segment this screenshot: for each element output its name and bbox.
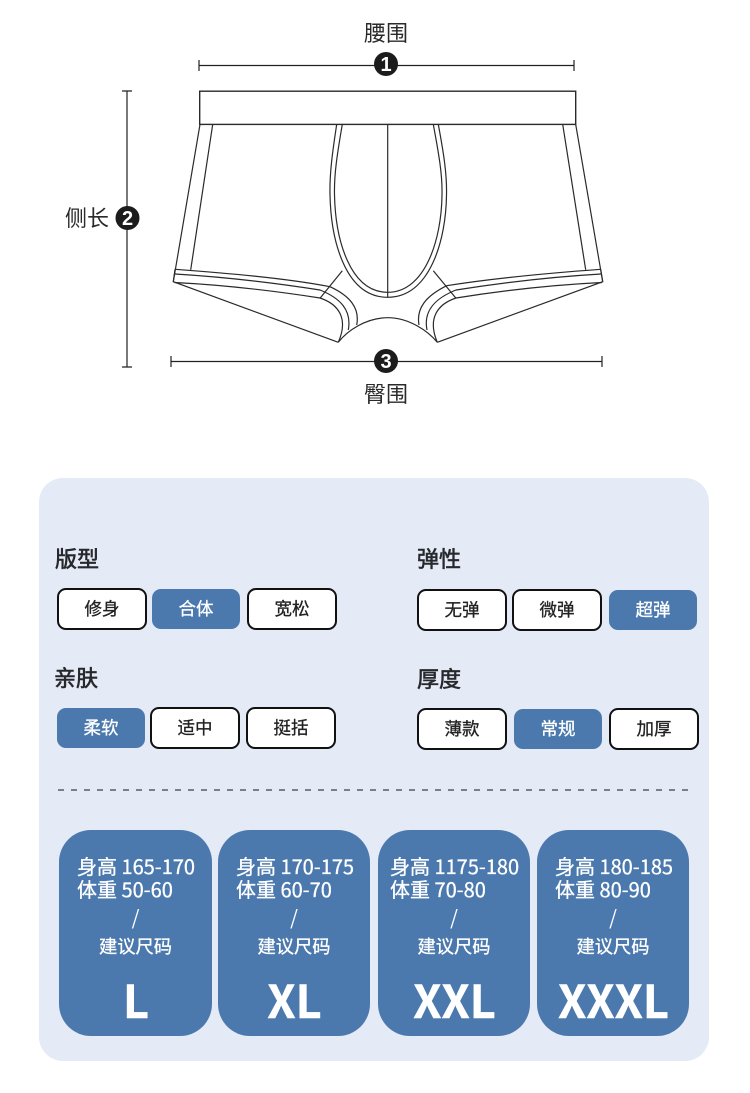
size card: L: 建议尺码 bbox=[99, 933, 172, 959]
badge 3: 3 bbox=[380, 351, 392, 373]
options: 版型 bbox=[57, 588, 337, 630]
size card: XL: / bbox=[290, 902, 298, 931]
size card: XXXL: / bbox=[609, 902, 617, 931]
badge 2 bbox=[116, 206, 140, 230]
badge 2: 2 bbox=[122, 208, 133, 230]
options: 弹性: 无弹 bbox=[444, 597, 480, 622]
badge 1: 1 bbox=[380, 54, 392, 76]
options: 亲肤: 柔软 bbox=[84, 715, 118, 740]
dashed divider bbox=[58, 789, 688, 791]
size card: XXL: 身高 1175-180 bbox=[390, 851, 519, 880]
options: 厚度: 加厚 bbox=[636, 716, 672, 741]
options: 版型: 修身 bbox=[84, 596, 120, 621]
size card: XL: 体重 60-70 bbox=[236, 874, 332, 903]
label: hip: 臀围 bbox=[364, 377, 408, 409]
size card: L: / bbox=[132, 902, 139, 931]
measurement diagram: boxer briefs bbox=[65, 16, 604, 409]
options: 亲肤: 挺括 bbox=[274, 715, 308, 740]
size card: XXXL: 建议尺码 bbox=[576, 933, 650, 959]
size card: L: 身高 165-170 bbox=[77, 851, 195, 880]
options: 厚度: 薄款 bbox=[444, 716, 480, 741]
size card: XL: 身高 170-175 bbox=[236, 851, 354, 880]
label: waist: 腰围 bbox=[364, 16, 408, 48]
badge 1 bbox=[374, 52, 398, 76]
size card: XXXL: 体重 80-90 bbox=[555, 874, 651, 903]
size card: XL bbox=[218, 830, 370, 1036]
heading: 弹性: 弹性 bbox=[417, 542, 461, 574]
size card: XXL: XXL bbox=[413, 966, 496, 1031]
options: 版型: 宽松 bbox=[274, 596, 310, 621]
garment outline bbox=[173, 91, 603, 342]
options: 厚度 bbox=[417, 708, 699, 750]
options: 厚度: 常规 bbox=[540, 716, 576, 741]
label: side length: 侧长 bbox=[65, 201, 109, 233]
size card: XXL bbox=[378, 830, 530, 1036]
options: 弹性 bbox=[417, 589, 697, 631]
size card: XXL: 建议尺码 bbox=[417, 933, 491, 959]
heading: 亲肤: 亲肤 bbox=[54, 660, 98, 692]
options: 亲肤 bbox=[57, 707, 336, 749]
size card: XXL: / bbox=[450, 902, 458, 931]
dimension 3: hip line bbox=[171, 356, 602, 367]
size card: L bbox=[59, 830, 212, 1036]
size card: XL: 建议尺码 bbox=[257, 933, 331, 959]
size card: L: L bbox=[123, 966, 149, 1031]
dimension 2: side length line bbox=[122, 91, 132, 367]
size card: XXXL: XXXL bbox=[558, 966, 669, 1031]
heading: 版型: 版型 bbox=[55, 542, 99, 574]
options: 亲肤: 适中 bbox=[178, 715, 212, 740]
panel: attributes and sizes background bbox=[39, 478, 709, 1061]
size card: XXL: 体重 70-80 bbox=[390, 874, 486, 903]
size card: XL: XL bbox=[267, 966, 322, 1031]
dimension 1: waist line bbox=[199, 60, 574, 71]
heading: 厚度: 厚度 bbox=[417, 662, 461, 694]
size card: XXXL: 身高 180-185 bbox=[555, 851, 673, 880]
options: 弹性: 微弹 bbox=[540, 597, 574, 622]
size card: L: 体重 50-60 bbox=[77, 874, 173, 903]
options: 版型: 合体 bbox=[178, 596, 214, 621]
badge 3 bbox=[374, 349, 398, 373]
size card: XXXL bbox=[537, 830, 689, 1036]
options: 弹性: 超弹 bbox=[636, 597, 670, 622]
